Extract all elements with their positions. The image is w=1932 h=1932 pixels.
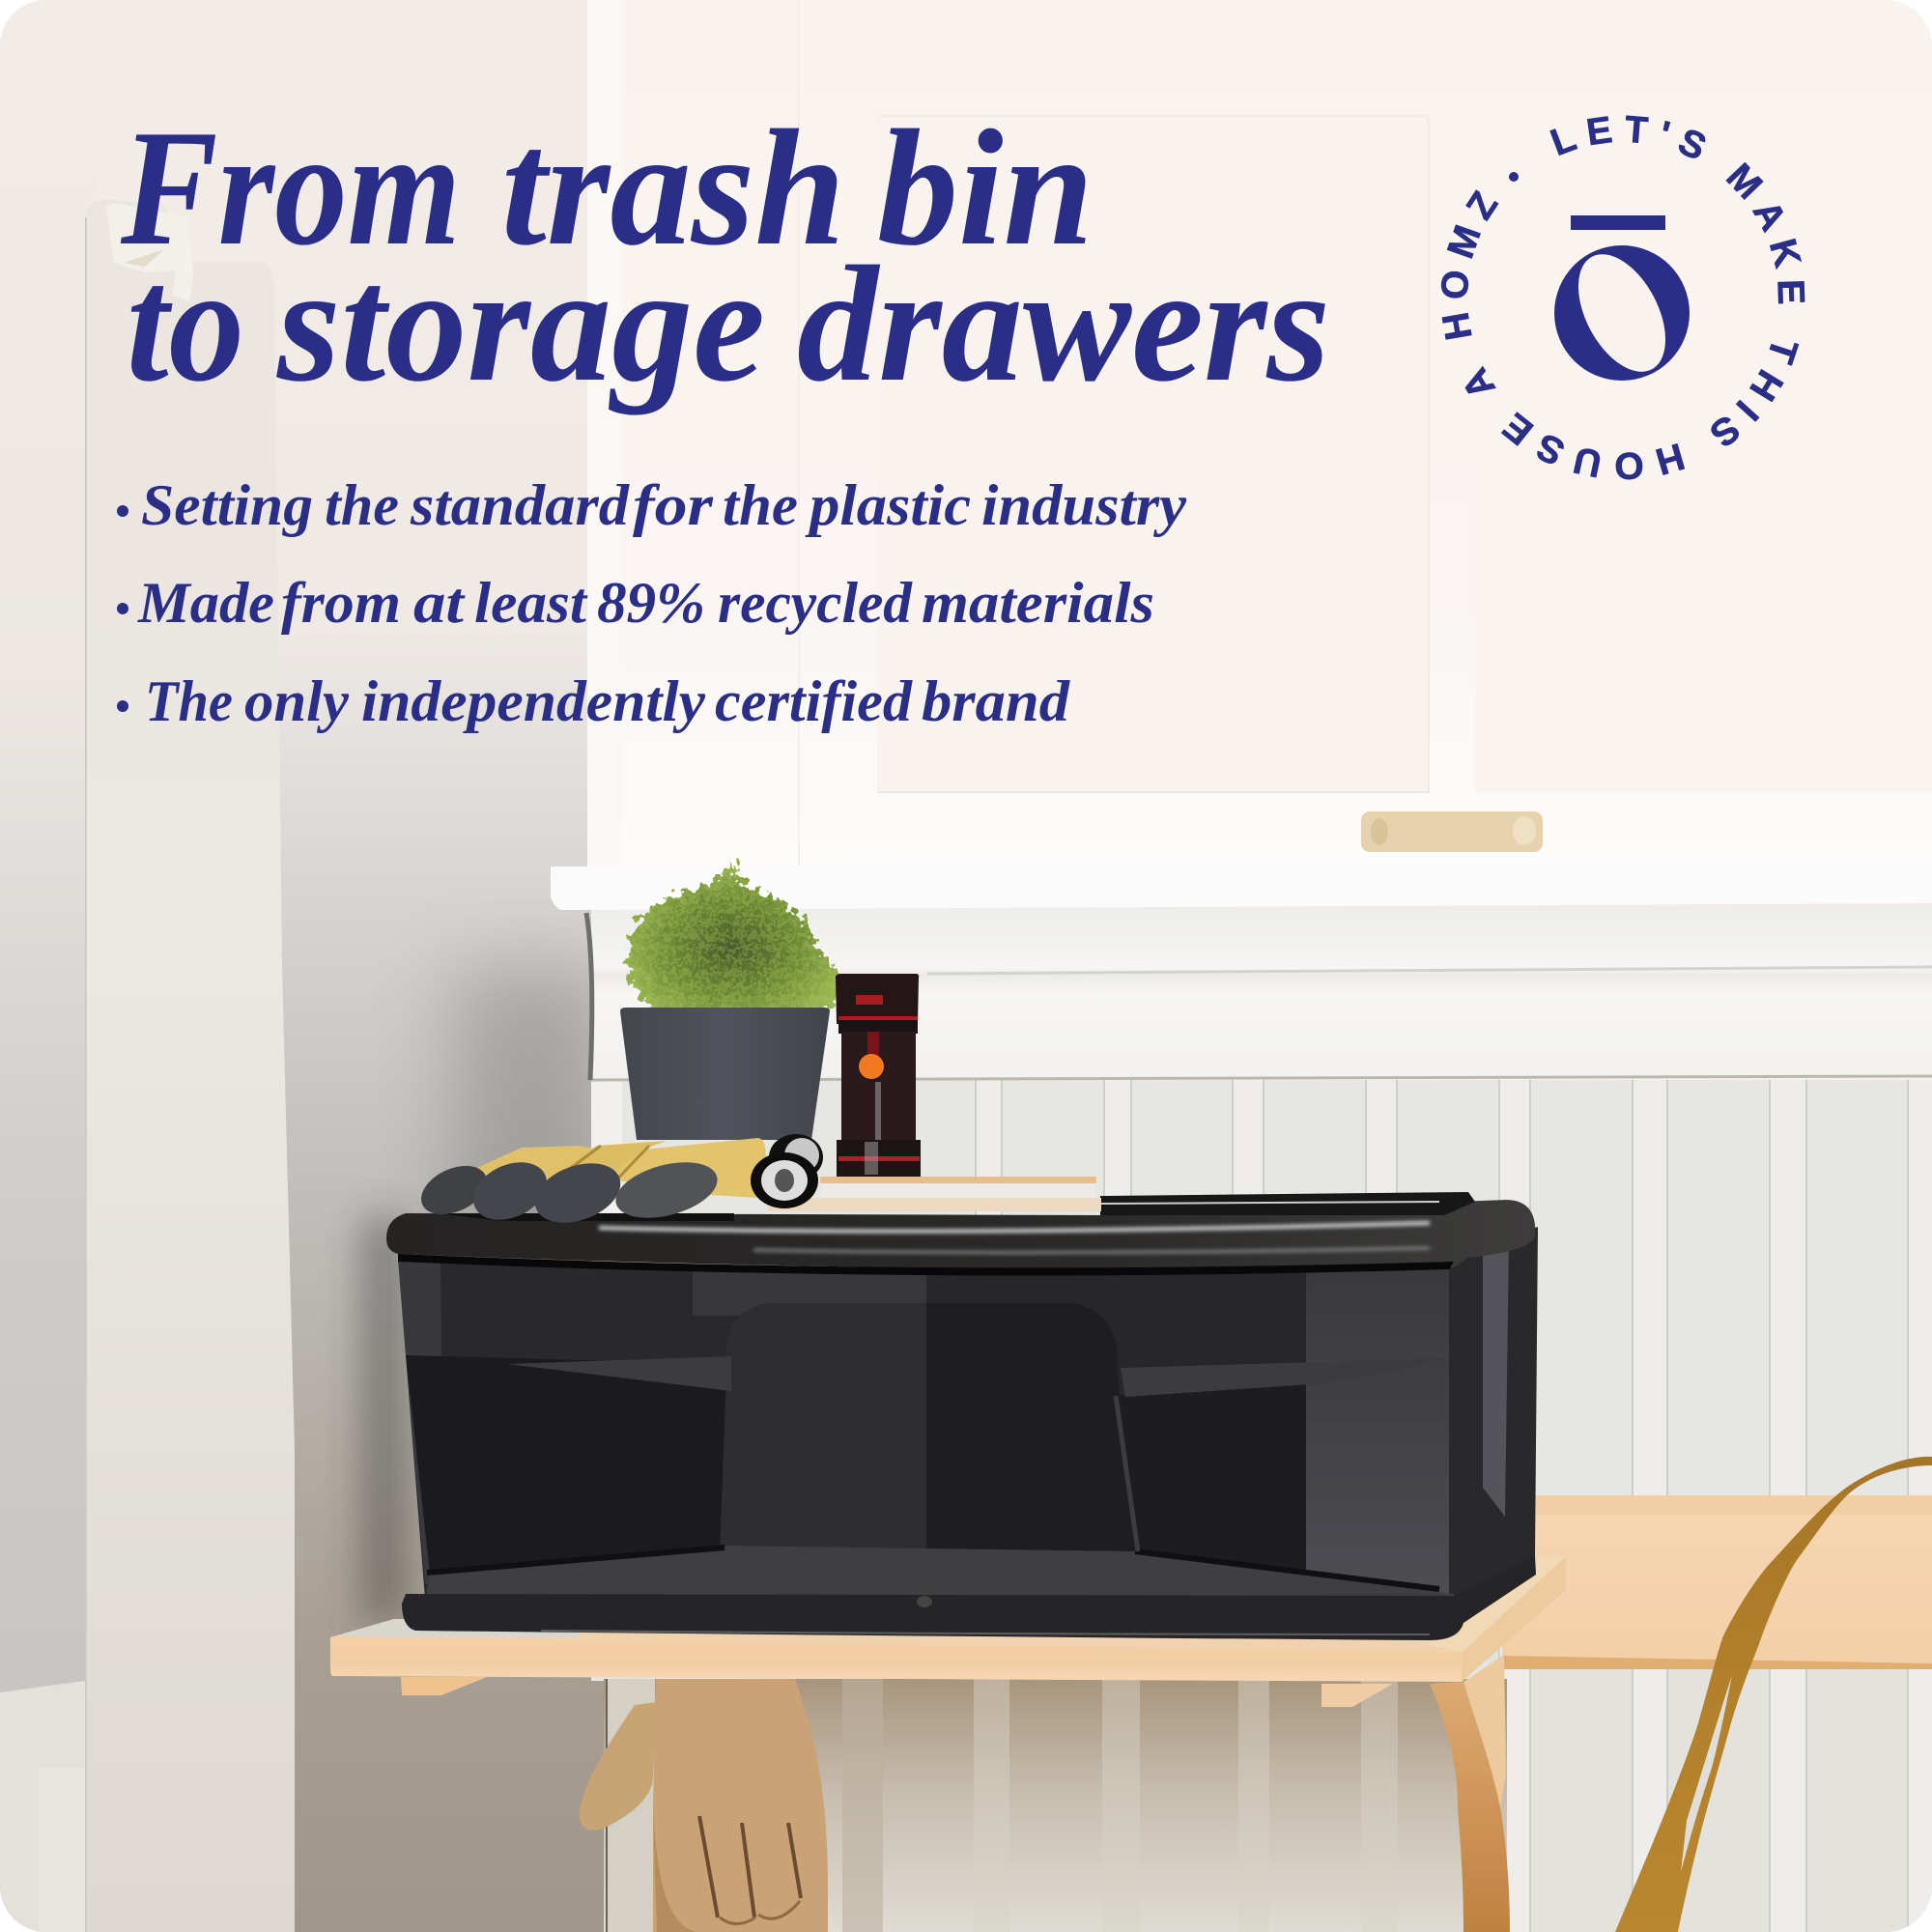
- bullet three: The: [145, 669, 233, 733]
- bullet one: the: [325, 473, 399, 537]
- base wash: [97, 0, 1932, 908]
- plant pot: [620, 1008, 830, 1140]
- bullet three: brand: [922, 669, 1070, 733]
- bullet one: standard: [410, 473, 630, 537]
- title: From: [120, 97, 461, 280]
- bullet two: [117, 571, 1154, 635]
- title: to: [127, 233, 244, 416]
- drawer side: [1454, 1227, 1538, 1596]
- bench board and back rail: [1502, 1495, 1932, 1669]
- hanging work glove: [580, 1679, 828, 1932]
- bullet three: certified: [715, 669, 913, 733]
- shelf brackets: [401, 1655, 1510, 1932]
- ring text: LET'S MAKE THIS HOUSE A HOMZ: [1441, 115, 1804, 479]
- bullet one: industry: [981, 473, 1186, 537]
- bullet three: only: [244, 669, 349, 733]
- bullet one: [117, 473, 1186, 537]
- window sill: [551, 866, 1932, 910]
- book stack on lid: [768, 1177, 1101, 1211]
- white post: [85, 199, 295, 1932]
- bullet two: 89%: [597, 571, 705, 635]
- circular brand badge: [1441, 115, 1804, 479]
- orange button: [859, 1054, 884, 1079]
- bullet list: [117, 473, 1186, 733]
- recessed lid slot: [1100, 1192, 1475, 1215]
- bullet one: plastic: [805, 473, 971, 537]
- bullet three: independently: [361, 669, 705, 733]
- bullet two: materials: [922, 571, 1154, 635]
- far left wall: [0, 712, 85, 1932]
- plant: [620, 863, 839, 1140]
- bullet one: for: [633, 473, 714, 537]
- drawer base: [402, 1555, 1536, 1640]
- beadboard wainscot: [591, 1077, 1932, 1932]
- bag strap: [1615, 1457, 1932, 1932]
- flashlight: [836, 974, 921, 1177]
- logo o counter: [1560, 240, 1684, 386]
- ring dot: [1509, 172, 1519, 182]
- work gloves on lid: [421, 1138, 766, 1223]
- bullet two: recycled: [718, 571, 913, 635]
- side wall in shadow: [279, 675, 604, 1932]
- baseboard moulding: [586, 908, 1932, 1080]
- title: [120, 97, 1330, 416]
- storage drawer: [386, 1192, 1538, 1640]
- bullet two: least: [474, 571, 588, 635]
- logo o mark: [1554, 245, 1690, 381]
- bullet one: the: [723, 473, 798, 537]
- tape wheel: [751, 1134, 823, 1208]
- title: trash: [501, 97, 845, 280]
- bullet one: Setting: [141, 473, 313, 537]
- bullet three: [117, 669, 1070, 733]
- bullet two: from: [281, 571, 401, 635]
- drawer lid: [386, 1200, 1535, 1269]
- title: storage: [276, 233, 765, 416]
- bullet two: Made: [137, 571, 274, 635]
- wooden shelf: [330, 1556, 1566, 1682]
- title: drawers: [797, 233, 1330, 416]
- upper cabinet: [587, 0, 1932, 869]
- title: bin: [877, 97, 1094, 280]
- bullet two: at: [413, 571, 467, 635]
- logo macron bar: [1571, 215, 1665, 230]
- lower beadboard: [604, 1679, 1507, 1932]
- cabinet handle: [1361, 811, 1543, 852]
- drawer glass front: [398, 1259, 1454, 1599]
